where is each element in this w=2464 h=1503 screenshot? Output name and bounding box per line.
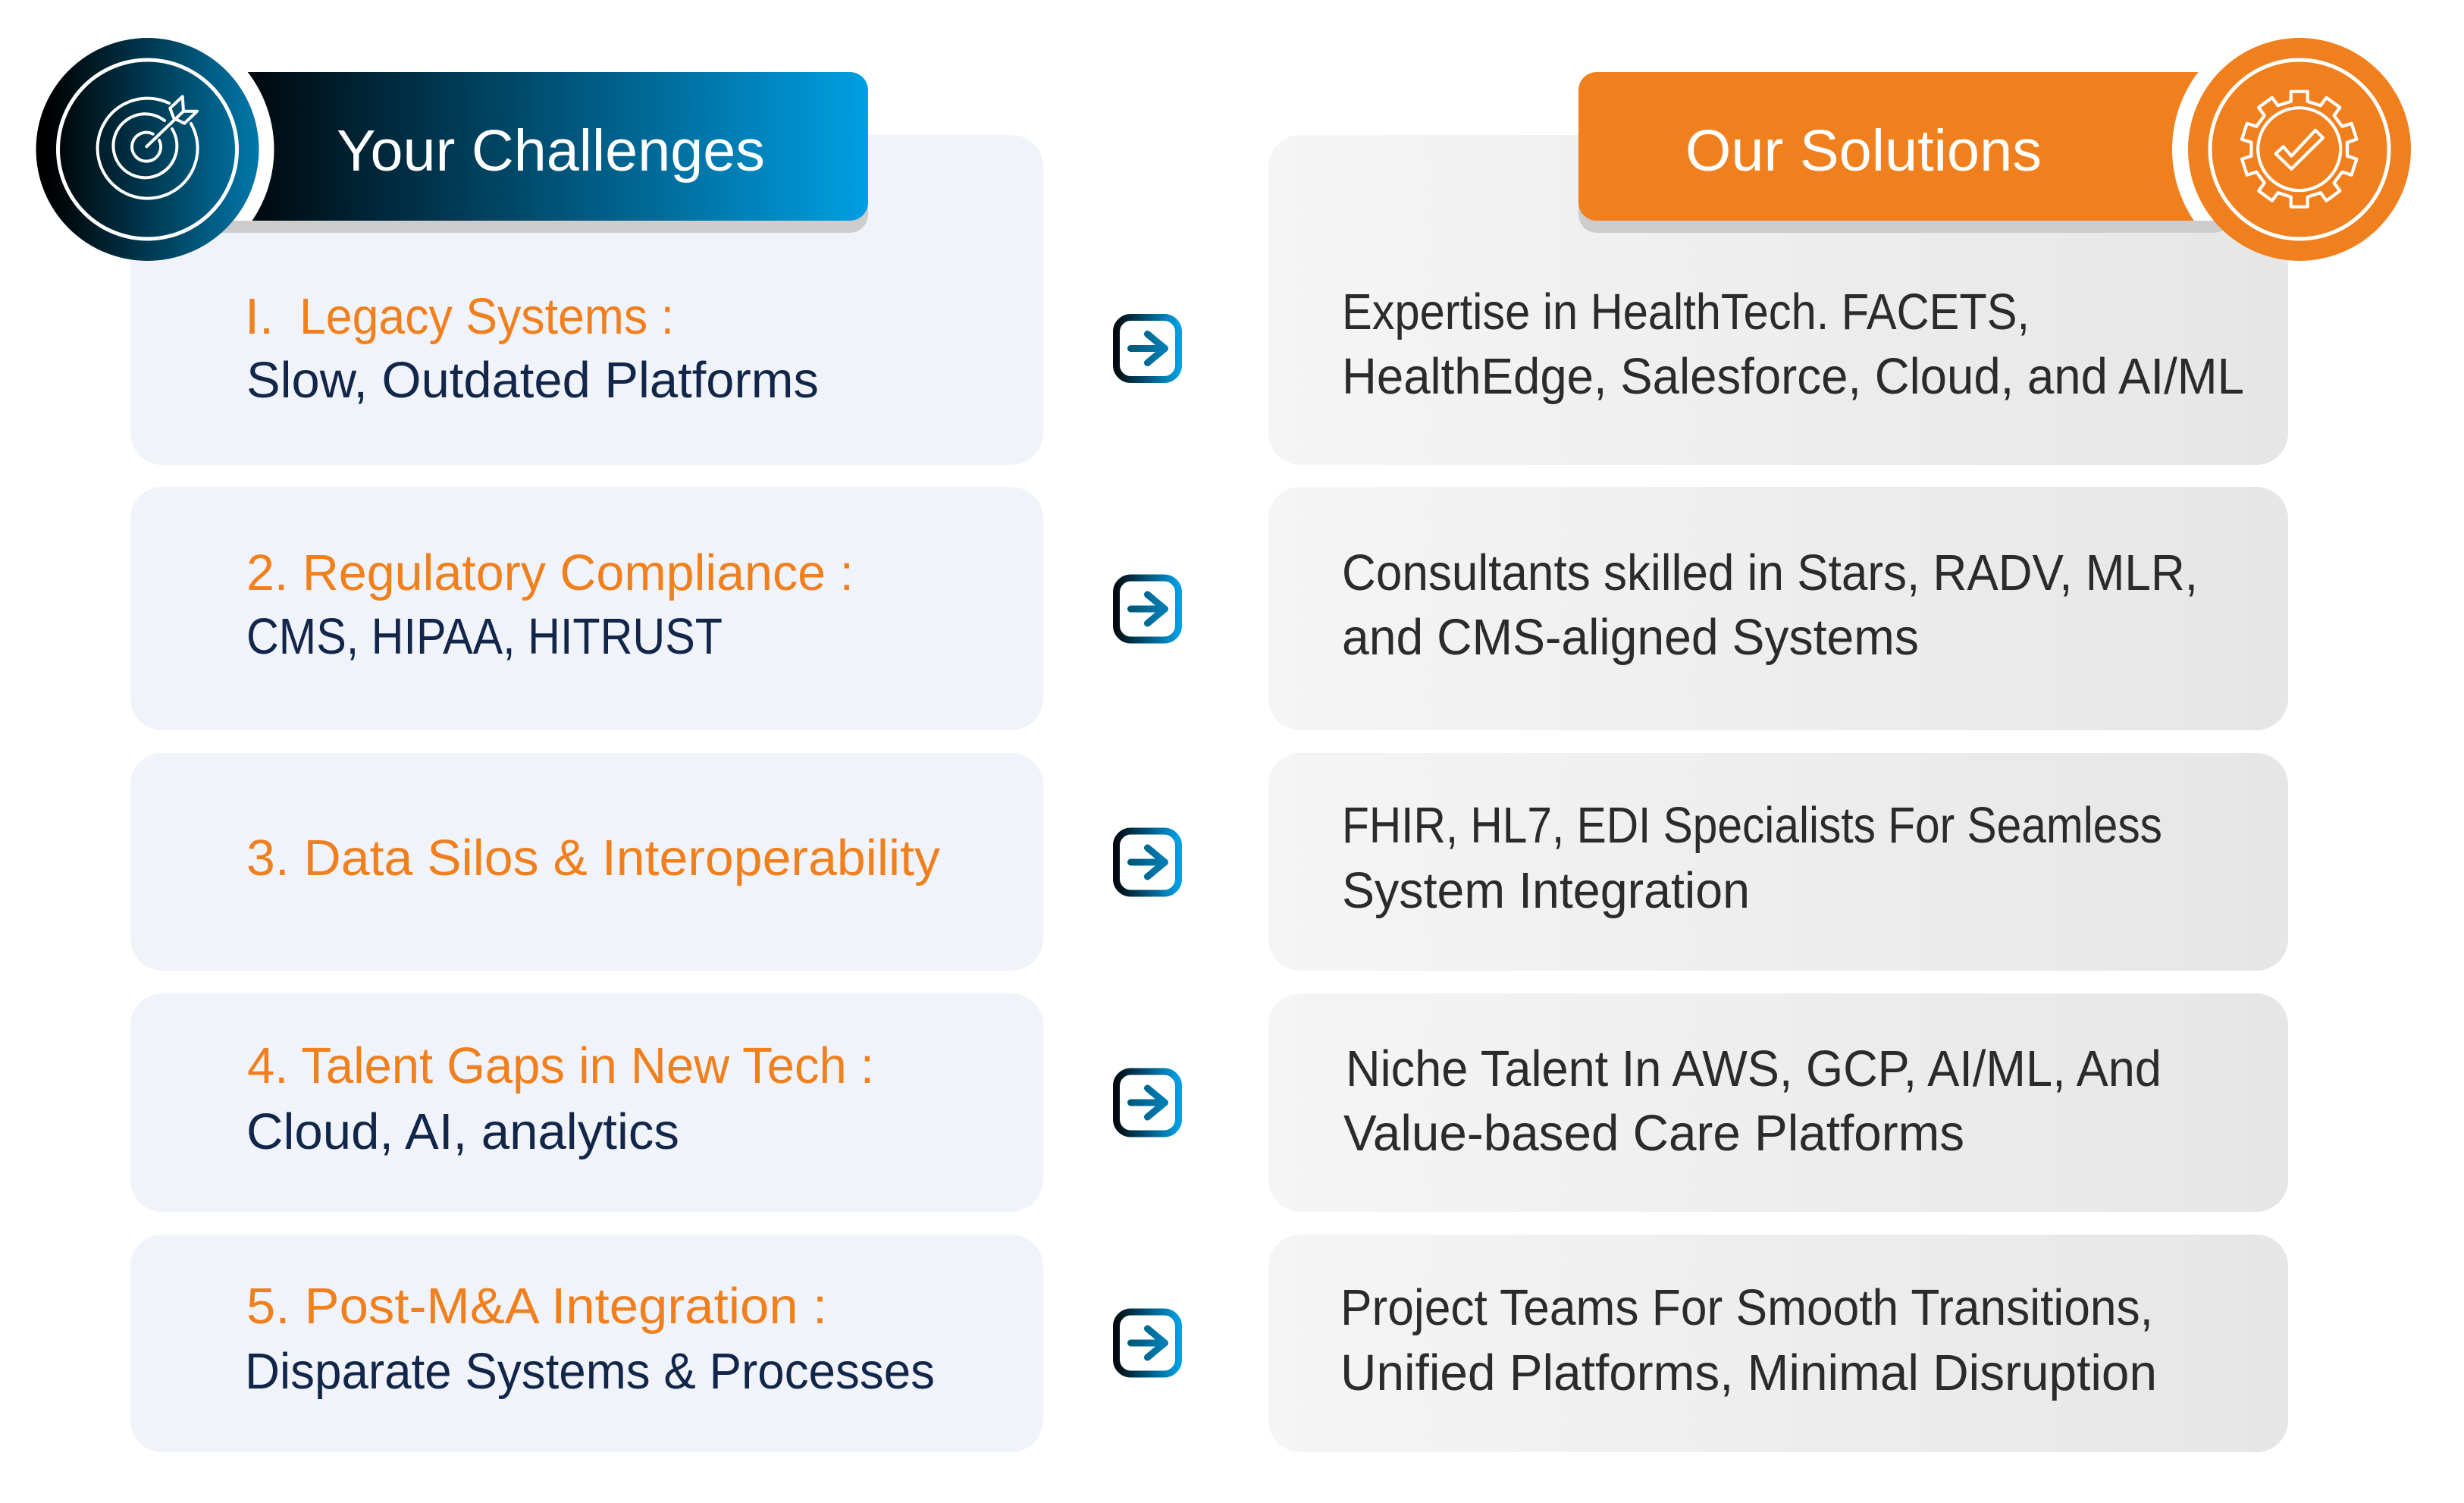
panel background	[1268, 487, 2288, 730]
panel background	[130, 135, 1043, 465]
panel background	[130, 753, 1043, 971]
challenge detail: Cloud, AI, analytics	[246, 1103, 679, 1160]
arrow 3	[1116, 831, 1178, 893]
heading: Your Challenges	[337, 118, 765, 184]
solution text: Expertise in HealthTech. FACETS,	[1342, 284, 2030, 340]
solution text: Project Teams For Smooth Transitions,	[1340, 1279, 2153, 1336]
solution text	[1342, 284, 2244, 405]
header bar	[227, 72, 868, 221]
solution text: HealthEdge, Salesforce, Cloud, and AI/ML	[1342, 348, 2244, 405]
header: our solutions	[1578, 38, 2411, 261]
row 2 solution	[1268, 487, 2288, 730]
challenge detail: Disparate Systems & Processes	[245, 1343, 935, 1400]
arrow 4	[1116, 1072, 1178, 1134]
arrow 2	[1116, 578, 1178, 640]
solution text: FHIR, HL7, EDI Specialists For Seamless	[1342, 797, 2162, 854]
row 1 challenge	[130, 135, 1043, 465]
icon: target with arrow	[98, 96, 198, 199]
panel background	[1268, 993, 2288, 1212]
solution text	[1342, 797, 2162, 919]
row 5 solution	[1268, 1235, 2288, 1452]
challenge heading: Legacy Systems :	[299, 288, 674, 345]
panel background	[130, 1235, 1043, 1452]
badge ring	[58, 60, 237, 239]
row 3 solution	[1268, 753, 2288, 971]
icon: gear with check	[2242, 92, 2356, 207]
panel background	[1268, 135, 2288, 465]
header shadow	[1578, 84, 2232, 233]
panel background	[130, 993, 1043, 1212]
solution text	[1340, 1279, 2157, 1401]
row 1 solution	[1268, 135, 2288, 465]
header: your challenges	[36, 38, 868, 261]
challenge heading: 3. Data Silos & Interoperability	[246, 830, 941, 886]
header bar	[1578, 72, 2237, 221]
row 4 challenge	[130, 993, 1043, 1212]
arrow 5	[1116, 1312, 1178, 1374]
number: I.	[245, 288, 274, 345]
challenge heading: 4. Talent Gaps in New Tech :	[247, 1037, 874, 1094]
solution text: Consultants skilled in Stars, RADV, MLR,	[1342, 544, 2198, 601]
panel background	[1268, 1235, 2288, 1452]
panel background	[1268, 753, 2288, 971]
solution text: and CMS-aligned Systems	[1342, 609, 1919, 666]
challenge heading: 5. Post-M&A Integration :	[246, 1278, 827, 1335]
solution text: Value-based Care Platforms	[1343, 1105, 1964, 1162]
heading: Our Solutions	[1685, 118, 2042, 184]
white ring around badge	[2172, 72, 2219, 221]
arrow 1	[1116, 317, 1178, 379]
badge circle	[36, 38, 259, 261]
solution text	[1342, 544, 2198, 666]
white ring around badge	[227, 72, 274, 221]
badge circle	[2188, 38, 2411, 261]
row 4 solution	[1268, 993, 2288, 1212]
solution text: System Integration	[1342, 862, 1750, 919]
badge ring	[2210, 60, 2389, 239]
row 2 challenge	[130, 487, 1043, 730]
challenge detail: Slow, Outdated Platforms	[246, 352, 819, 409]
solution text: Niche Talent In AWS, GCP, AI/ML, And	[1346, 1040, 2161, 1097]
solution text	[1343, 1040, 2161, 1162]
challenge heading: 2. Regulatory Compliance :	[246, 544, 854, 601]
panel background	[130, 487, 1043, 730]
challenge detail: CMS, HIPAA, HITRUST	[246, 608, 723, 665]
row 5 challenge	[130, 1235, 1043, 1452]
row 3 challenge	[130, 753, 1043, 971]
solution text: Unified Platforms, Minimal Disruption	[1340, 1345, 2157, 1401]
header shadow	[190, 84, 868, 233]
